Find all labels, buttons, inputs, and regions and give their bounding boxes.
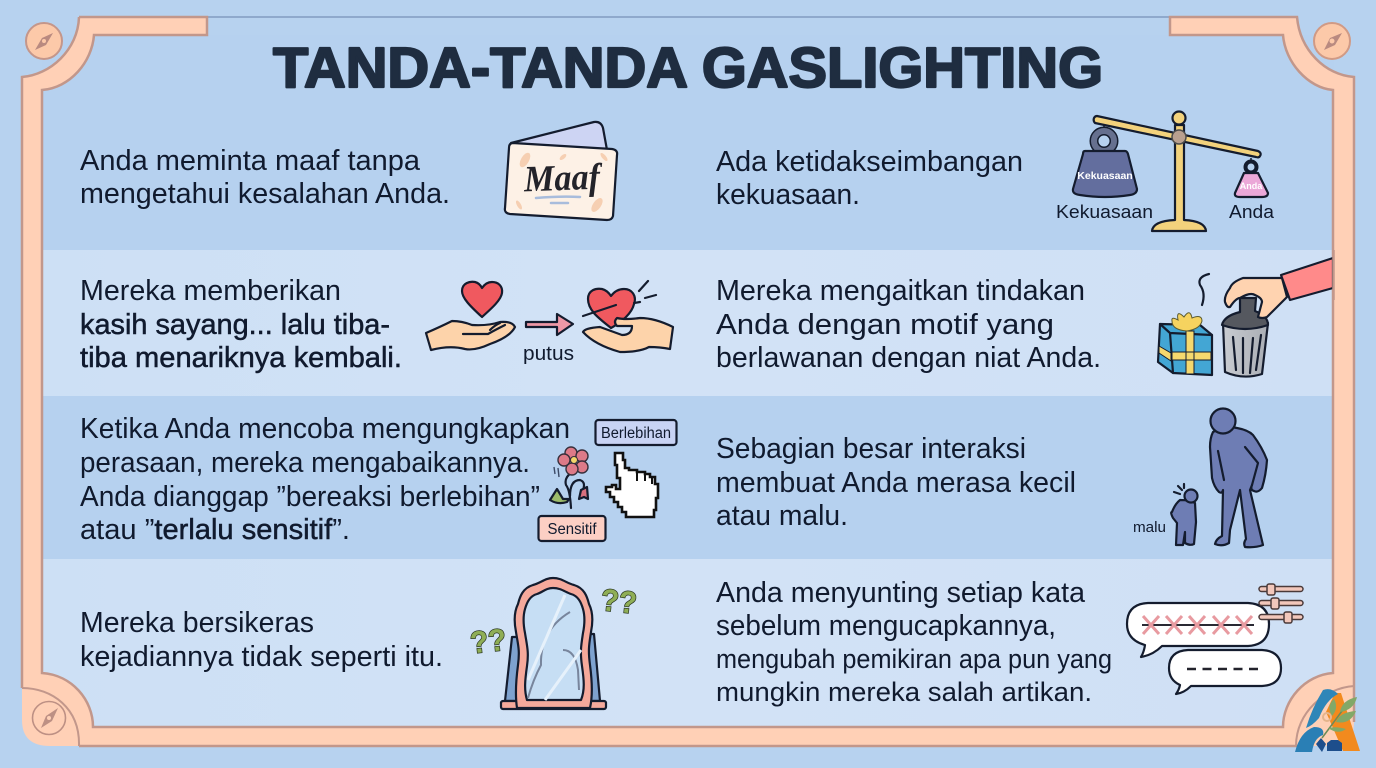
text: motives: Anda dengan motif yang <box>716 309 1054 341</box>
icon: maaf card: Maaf <box>522 157 604 200</box>
text: motives <box>716 275 1101 374</box>
icon: flower, cursor and tags: Berlebihan <box>601 425 671 442</box>
text: power imbalance <box>716 146 1023 211</box>
text: self censoring: mengubah pemikiran apa pun yang <box>716 644 1112 674</box>
title: TANDA-TANDA GASLIGHTING <box>273 36 1103 100</box>
icon: flower, cursor and tags <box>538 420 676 541</box>
icon: balance scale <box>1056 112 1275 231</box>
text: motives: Mereka mengaitkan tindakan <box>716 275 1085 307</box>
text: denial: Mereka bersikeras <box>80 607 314 639</box>
text: dismissal: Ketika Anda mencoba mengungkapkan <box>80 413 570 445</box>
text: apology: mengetahui kesalahan Anda. <box>80 178 450 210</box>
icon: flower, cursor and tags: Sensitif <box>548 521 597 538</box>
text: apology <box>80 145 450 210</box>
text: feeling small: Sebagian besar interaksi <box>716 433 1026 465</box>
text: feeling small <box>716 433 1076 532</box>
text: feeling small: atau malu. <box>716 500 848 532</box>
icon: compass top right <box>1314 23 1350 59</box>
text: apology: Anda meminta maaf tanpa <box>80 145 421 177</box>
icon: question marks right: ?? <box>599 582 639 621</box>
text: self censoring: mungkin mereka salah artikan. <box>716 677 1092 707</box>
text: affection withdrawn: kasih sayang... lalu tiba- <box>80 309 390 341</box>
icon: large and small figures <box>1133 408 1267 547</box>
text: power imbalance: Ada ketidakseimbangan <box>716 146 1023 178</box>
icon: compass bottom left <box>32 702 66 734</box>
icon: balance scale: Anda <box>1240 181 1263 191</box>
text: dismissal: Anda dianggap ”bereaksi berlebihan” <box>80 481 540 513</box>
icon: cracked mirror <box>501 578 606 709</box>
text: motives: berlawanan dengan niat Anda. <box>716 342 1101 374</box>
text: feeling small: membuat Anda merasa kecil <box>716 467 1076 499</box>
icon: logo <box>1295 689 1360 752</box>
icon: speech bubbles and sliders <box>1127 584 1303 694</box>
icon: balance scale: Anda <box>1229 201 1275 222</box>
icon: balance scale: Kekuasaan <box>1077 170 1133 182</box>
icon: hands and heart: putus <box>523 343 574 365</box>
text: dismissal <box>80 413 570 546</box>
icon: hands and heart <box>426 281 673 365</box>
icon: compass top left <box>26 23 62 59</box>
icon: large and small figures: malu <box>1133 519 1166 536</box>
text: self censoring <box>716 577 1112 707</box>
text: dismissal: perasaan, mereka mengabaikannya. <box>80 447 530 479</box>
text: denial <box>80 607 443 673</box>
icon: balance scale: Kekuasaan <box>1056 201 1153 222</box>
text: denial: kejadiannya tidak seperti itu. <box>80 641 443 673</box>
icon: gift thrown in trash <box>1158 250 1334 377</box>
text: dismissal: atau ”terlalu sensitif”. <box>80 514 350 546</box>
text: affection withdrawn <box>80 275 402 374</box>
text: power imbalance: kekuasaan. <box>716 179 860 211</box>
icon: maaf card <box>505 122 617 220</box>
text: self censoring: sebelum mengucapkannya, <box>716 610 1056 642</box>
text: affection withdrawn: tiba menariknya kembali. <box>80 342 402 374</box>
text: self censoring: Anda menyunting setiap kata <box>716 577 1086 609</box>
icon: question marks left: ?? <box>468 622 508 660</box>
text: affection withdrawn: Mereka memberikan <box>80 275 341 307</box>
